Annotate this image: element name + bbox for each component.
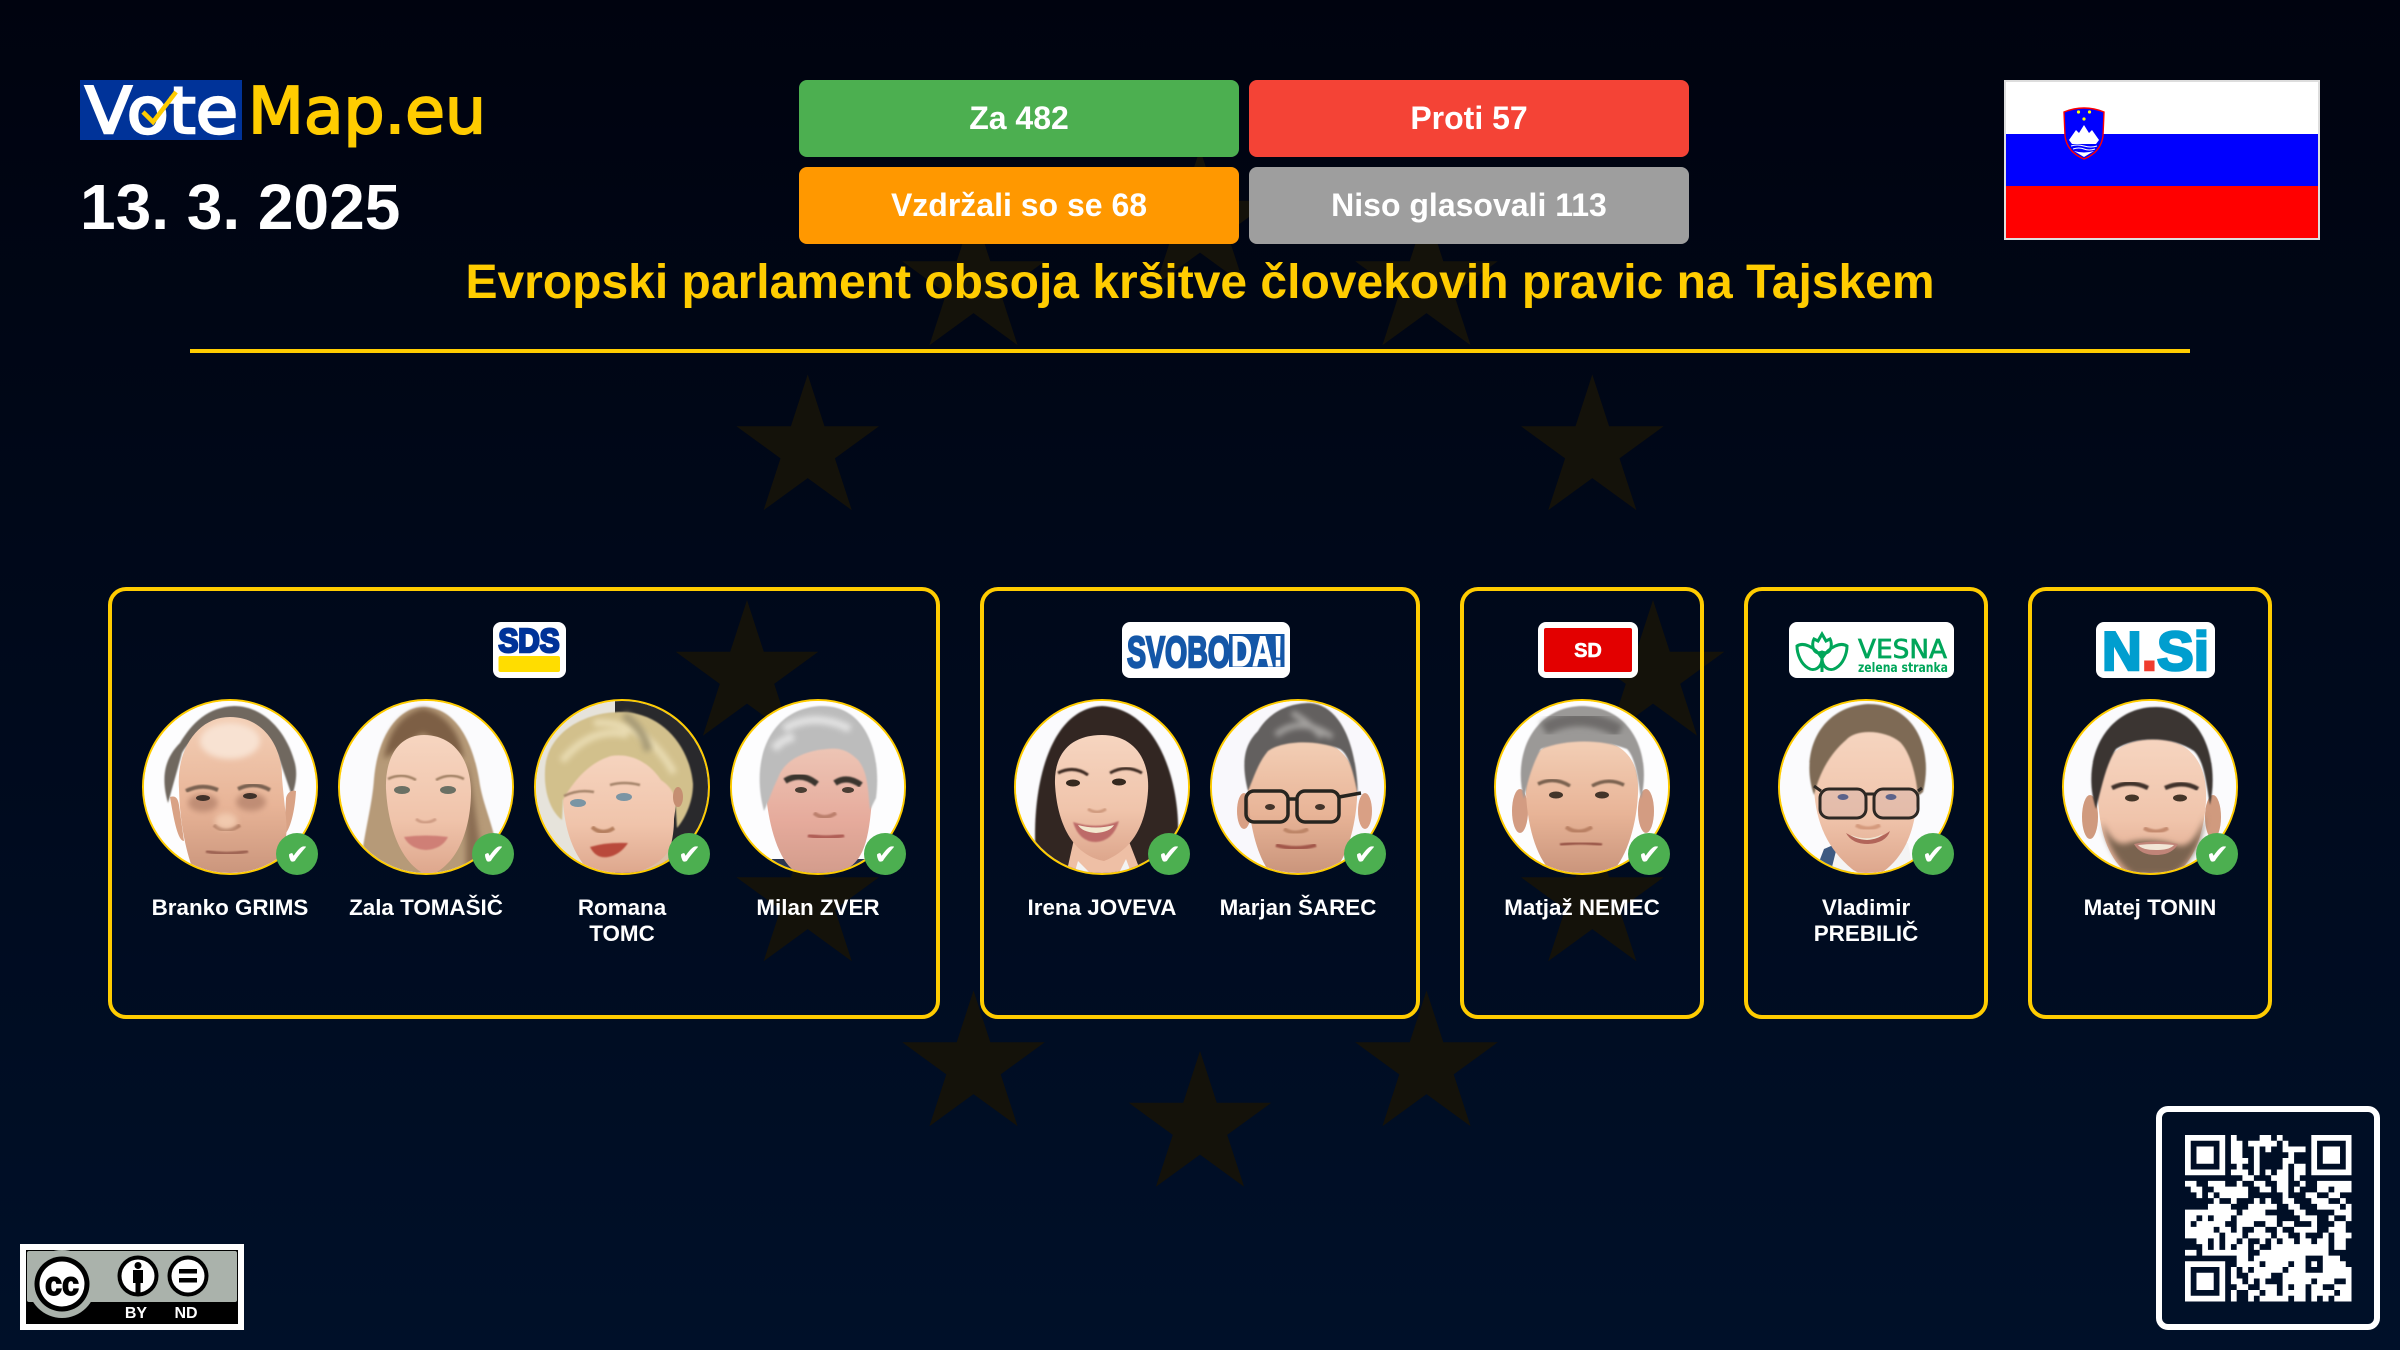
date: 13. 3. 2025 <box>80 171 400 243</box>
vote check: ✔ <box>874 838 897 871</box>
portrait <box>730 699 906 875</box>
QR code <box>2156 1106 2380 1330</box>
name <box>578 895 666 946</box>
name: Matej TONIN <box>2084 895 2216 920</box>
name: Romana <box>578 895 666 920</box>
vote check <box>864 833 906 875</box>
person: Milan Zver <box>730 699 906 920</box>
panel: SDS <box>108 587 940 1019</box>
logo: Vesna: VESNA <box>1858 635 1947 665</box>
vote check: ✔ <box>1354 838 1377 871</box>
logo: VoteMap.eu <box>80 80 486 149</box>
vote count: did not vote <box>1249 167 1689 244</box>
person: Matej Tonin <box>2062 699 2238 920</box>
vote check <box>1628 833 1670 875</box>
portrait <box>1494 699 1670 875</box>
person: Vladimir Prebilič <box>1778 699 1954 946</box>
title rule <box>190 349 2190 353</box>
name: Irena JOVEVA <box>1028 895 1176 920</box>
logo: Vesna <box>1789 622 1954 678</box>
person: Marjan Šarec <box>1210 699 1386 920</box>
licence badge: CC BY-ND: BY <box>125 1305 147 1322</box>
portrait <box>2062 699 2238 875</box>
vote check <box>2196 833 2238 875</box>
licence badge: CC BY-ND <box>20 1244 244 1330</box>
vote check: ✔ <box>286 838 309 871</box>
vote count: against <box>1249 80 1689 157</box>
vote check: ✔ <box>482 838 505 871</box>
person: Branko Grims <box>142 699 318 920</box>
logo: Svoboda: SVOBO <box>1127 628 1230 677</box>
flag: Slovenia <box>2004 80 2320 240</box>
vote check: ✔ <box>678 838 701 871</box>
vote count: for: Za 482 <box>969 100 1069 136</box>
portrait <box>1014 699 1190 875</box>
logo: SD <box>1538 622 1638 678</box>
vote check <box>1912 833 1954 875</box>
name: Matjaž NEMEC <box>1504 895 1660 920</box>
logo: SDS <box>493 622 566 678</box>
name: PREBILIČ <box>1814 921 1918 946</box>
panel: Vesna <box>1744 587 1988 1019</box>
licence badge: CC BY-ND: ND <box>174 1305 198 1322</box>
panel: SD <box>1460 587 1704 1019</box>
portrait <box>534 699 710 875</box>
person: Romana Tomc <box>534 699 710 946</box>
vote check: ✔ <box>1158 838 1181 871</box>
name: Zala TOMAŠIČ <box>349 895 503 920</box>
person: Matjaž Nemec <box>1494 699 1670 920</box>
vote check: ✔ <box>1638 838 1661 871</box>
portrait <box>1210 699 1386 875</box>
vote check <box>668 833 710 875</box>
name <box>1814 895 1918 946</box>
vote check <box>1148 833 1190 875</box>
person: Irena Joveva <box>1014 699 1190 920</box>
name: Milan ZVER <box>756 895 880 920</box>
name: Branko GRIMS <box>152 895 308 920</box>
title: Evropski parlament obsoja kršitve človekovih pravic na Tajskem <box>465 256 1935 309</box>
vote count: abstained: Vzdržali so se 68 <box>891 187 1147 223</box>
logo: SDS: SDS <box>498 622 560 659</box>
name: Vladimir <box>1822 895 1910 920</box>
panel: NSi <box>2028 587 2272 1019</box>
portrait <box>142 699 318 875</box>
licence badge: CC BY-ND: cc <box>45 1265 79 1302</box>
vote count: against: Proti 57 <box>1410 100 1528 136</box>
person: Zala Tomašič <box>338 699 514 920</box>
vote count: abstained <box>799 167 1239 244</box>
vote check <box>1344 833 1386 875</box>
vote count: did not vote: Niso glasovali 113 <box>1331 187 1607 223</box>
portrait <box>338 699 514 875</box>
vote check: ✔ <box>1922 838 1945 871</box>
vote count: for <box>799 80 1239 157</box>
vote check <box>276 833 318 875</box>
vote check: ✔ <box>2206 838 2229 871</box>
name: Marjan ŠAREC <box>1220 895 1376 920</box>
vote check <box>472 833 514 875</box>
name: TOMC <box>589 921 655 946</box>
panel: Svoboda <box>980 587 1420 1019</box>
portrait <box>1778 699 1954 875</box>
logo: SD: SD <box>1574 640 1602 662</box>
